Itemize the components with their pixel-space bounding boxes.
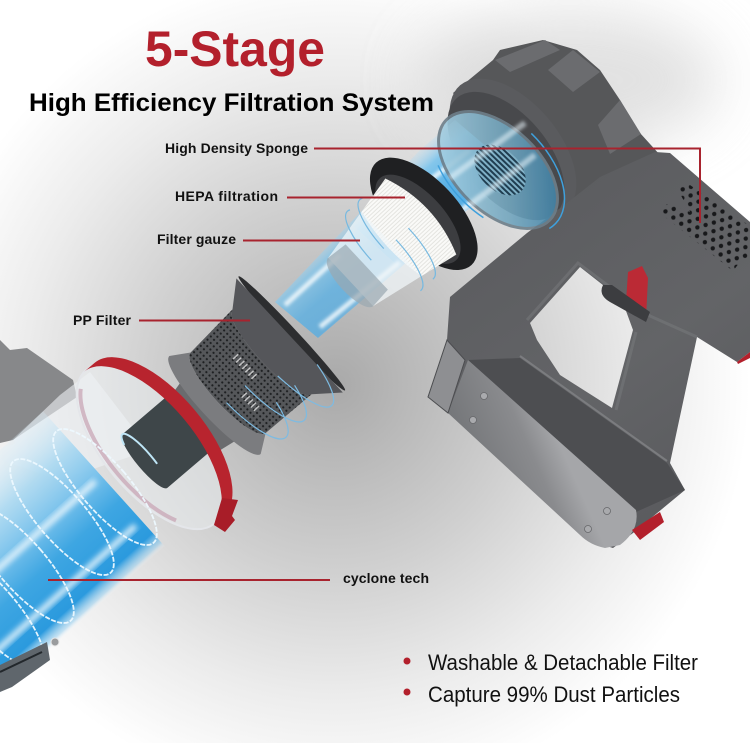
base flange [159, 344, 274, 464]
red end cap [632, 512, 664, 540]
gauze inner core [320, 243, 389, 314]
red tabs [214, 498, 238, 532]
red ring [84, 333, 259, 525]
label: PP Filter: PP Filter [73, 312, 132, 328]
red trigger [626, 266, 648, 318]
handle frame highlight [527, 263, 697, 410]
filter grid [465, 135, 535, 205]
cup base [0, 642, 50, 692]
label: cyclone tech: cyclone tech [343, 570, 429, 586]
core perforations [178, 309, 312, 445]
perforated core [178, 309, 312, 445]
filter swirl [168, 275, 346, 457]
blue air column [0, 411, 165, 743]
PP filter [138, 271, 350, 484]
HEPA and gauze cartridge [295, 139, 496, 341]
cyclone rings [0, 415, 172, 682]
grey hose [0, 340, 77, 443]
label: HEPA filtration: HEPA filtration [175, 188, 278, 204]
bullet list: Capture 99% Dust Particles [428, 682, 680, 707]
red top cap [737, 352, 750, 364]
plate latch [428, 340, 465, 413]
bullet list [404, 650, 698, 707]
title: 5-Stage [145, 21, 325, 77]
subtitle: High Efficiency Filtration System [29, 89, 434, 117]
bullet list: Washable & Detachable Filter [428, 650, 698, 675]
black rubber ring [351, 139, 496, 288]
label: High Density Sponge [165, 140, 700, 223]
filter gauze [321, 212, 422, 314]
collar [425, 56, 601, 240]
metal plate [448, 360, 637, 548]
tube swirl [116, 429, 173, 493]
neck [164, 374, 244, 456]
head segments [495, 40, 641, 154]
swirl arcs [407, 78, 589, 258]
main body [428, 152, 750, 548]
inner dark tube [116, 395, 214, 493]
translucent neck [0, 372, 150, 480]
battery belly [468, 358, 685, 512]
top flange [235, 273, 349, 394]
label: High Density Sponge: High Density Sponge [165, 140, 308, 156]
vent holes [660, 183, 750, 271]
cone [209, 278, 343, 418]
transparent lens [407, 78, 589, 258]
plate screws [470, 392, 610, 532]
head dome [453, 40, 660, 220]
cyclone dust cup [0, 333, 259, 743]
air beam [275, 120, 520, 338]
dust cup opening [50, 333, 259, 553]
lens light streak [450, 123, 535, 205]
vacuum body with handle [425, 40, 750, 548]
column light streaks [0, 481, 136, 743]
trigger lever [602, 285, 650, 322]
label: Filter gauze: Filter gauze [157, 231, 236, 247]
gauze swirl [336, 189, 445, 301]
highlight patches [220, 356, 273, 411]
pleated HEPA [352, 172, 464, 285]
